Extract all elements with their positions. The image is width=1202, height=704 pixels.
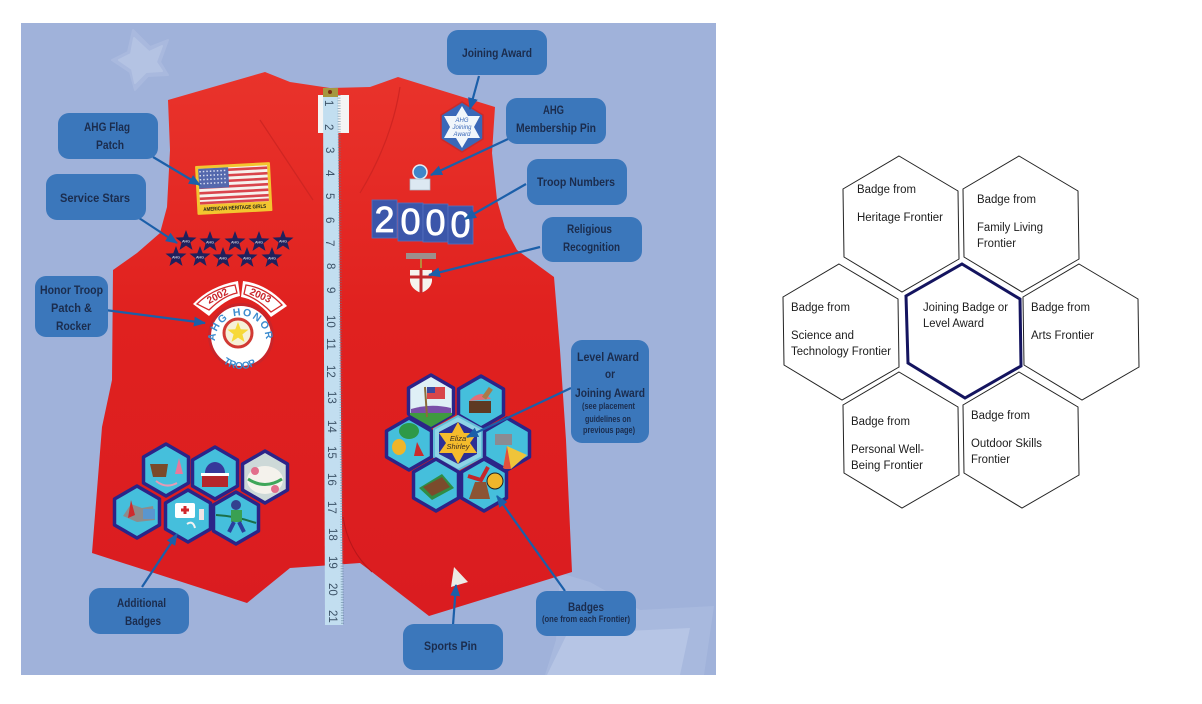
callout: sports pin (403, 624, 503, 670)
background star top left (112, 30, 168, 90)
honor patch: TROOP (224, 357, 254, 369)
measuring tape: 8 (324, 263, 336, 269)
callout: AHG flag patch: AHG Flag (84, 120, 130, 134)
measuring tape: 2 (322, 124, 334, 130)
hexagon: personal well-being frontier: Being Frontier (851, 460, 923, 472)
callout: AHG membership pin (506, 98, 606, 144)
hexagon: family living frontier: Frontier (977, 238, 1016, 250)
hexagon: arts frontier: Badge from (1031, 302, 1090, 314)
badge: bible (414, 459, 458, 511)
joining award patch: Award (453, 132, 471, 138)
measuring tape: 17 (325, 501, 337, 514)
hexagon: outdoor skills frontier: Badge from (971, 410, 1030, 422)
callout: level award (571, 340, 649, 443)
service stars: AHG (231, 240, 239, 244)
badge: level award star (434, 416, 482, 470)
callout: troop numbers: Troop Numbers (537, 175, 615, 189)
callout: level award: Joining Award (575, 386, 645, 400)
hexagon: science and technology frontier: Technology Frontier (791, 346, 891, 358)
hexagon: family living frontier: Family Living (977, 222, 1043, 234)
badge: first aid (166, 490, 210, 542)
hexagon: personal well-being frontier (843, 372, 959, 508)
hexagon: arts frontier (1023, 264, 1139, 400)
callout: badges: (one from each Frontier) (542, 614, 630, 624)
callout: level award: or (605, 367, 615, 381)
religious recognition medal (406, 253, 436, 293)
arrow: additional badges (142, 534, 177, 587)
callout: sports pin: Sports Pin (424, 639, 477, 653)
service stars: AHG (206, 240, 214, 244)
measuring tape: 6 (323, 217, 335, 223)
service stars: AHG (279, 240, 287, 244)
troop number patches: 2 (374, 199, 395, 240)
frontier badges group (386, 375, 530, 511)
callout: level award: previous page) (583, 425, 635, 435)
callout: religious recognition (542, 217, 642, 262)
honor troop patch and rocker (193, 281, 287, 369)
honor patch: AHG HONOR (208, 308, 273, 341)
badge: arts prism (484, 418, 530, 470)
troop number patches: 0 (425, 202, 446, 243)
rocker 2002: 2002 (205, 287, 231, 307)
badge: level award star: Shirley (447, 442, 471, 451)
hexagon: heritage frontier: Heritage Frontier (857, 212, 943, 224)
joining award patch (441, 102, 483, 152)
troop number patches (372, 199, 473, 245)
callout: service stars: Service Stars (60, 191, 130, 205)
measuring tape: 21 (326, 610, 338, 623)
callout: badges (536, 591, 636, 636)
callout: honor troop: Honor Troop (40, 283, 103, 297)
background star bottom right (545, 573, 714, 675)
hexagon: heritage frontier (843, 156, 959, 292)
callout: troop numbers (527, 159, 627, 205)
badge: basket (144, 444, 188, 496)
sports pin (451, 567, 468, 587)
measuring tape: 3 (323, 147, 335, 153)
callout: religious recognition: Recognition (563, 240, 620, 254)
hexagon: joining badge or level award (906, 264, 1021, 398)
arrow: level award (467, 388, 571, 437)
badge: chest (458, 376, 504, 428)
callout: AHG flag patch: Patch (96, 138, 124, 152)
callout: additional badges: Badges (125, 614, 161, 628)
hexagon: arts frontier: Arts Frontier (1031, 330, 1094, 342)
flag patch (195, 162, 272, 215)
hexagon: outdoor skills frontier: Outdoor Skills (971, 438, 1042, 450)
badge: flag (408, 375, 454, 427)
measuring tape: 13 (325, 391, 337, 404)
hexagon: outdoor skills frontier (963, 372, 1079, 508)
callout: badges: Badges (568, 600, 604, 614)
measuring tape: 1 (322, 100, 334, 106)
flag patch: AMERICAN HERITAGE GIRLS (203, 204, 267, 213)
panel: vest photo (21, 23, 716, 675)
panel background (21, 23, 716, 675)
badge: outdoor (462, 459, 506, 511)
measuring tape: 11 (324, 338, 336, 350)
service stars: AHG (268, 256, 276, 260)
hexagon: outdoor skills frontier: Frontier (971, 454, 1010, 466)
arrow: membership pin (431, 139, 508, 175)
red vest (92, 72, 572, 616)
troop number patches: 0 (400, 201, 421, 242)
callout: additional badges (89, 588, 189, 634)
panel: badge placement hexagon diagram (783, 156, 1139, 508)
additional badges group (114, 444, 288, 544)
callout: level award: Level Award (577, 350, 639, 364)
arrows (105, 76, 571, 625)
callout: honor troop: Rocker (56, 319, 91, 333)
callout: religious recognition: Religious (567, 222, 612, 236)
service stars: AHG (219, 256, 227, 260)
measuring tape: 15 (325, 446, 337, 459)
service stars: AHG (255, 240, 263, 244)
arrow: troop numbers (465, 184, 526, 219)
measuring tape: 18 (326, 528, 338, 541)
measuring tape: 7 (323, 240, 335, 246)
callout: service stars (46, 174, 146, 220)
hexagon: joining badge or level award: Level Award (923, 318, 984, 330)
hexagon: family living frontier: Badge from (977, 194, 1036, 206)
badge: map (114, 486, 160, 538)
joining award patch: AHG (454, 118, 469, 124)
badge: level award star: Eliza (450, 434, 466, 443)
callout: honor troop: Patch & (51, 301, 92, 315)
badge: nature (386, 418, 432, 470)
measuring tape: 10 (324, 315, 336, 328)
arrow: honor troop (105, 310, 205, 323)
service stars: AHG (243, 256, 251, 260)
measuring tape: 19 (326, 556, 338, 569)
callout: AHG flag patch (58, 113, 158, 159)
callout: AHG membership pin: Membership Pin (516, 121, 596, 135)
arrow: service stars (139, 218, 177, 243)
arrow: badges (497, 496, 565, 591)
measuring tape: 16 (325, 473, 337, 486)
callouts (35, 30, 649, 670)
callout: level award: (see placement (582, 401, 635, 411)
callout: joining award (447, 30, 547, 75)
service stars: AHG (182, 240, 190, 244)
badge: capitol (192, 447, 238, 499)
hexagon: personal well-being frontier: Personal Well- (851, 444, 924, 456)
hexagon: personal well-being frontier: Badge from (851, 416, 910, 428)
measuring tape: 9 (324, 287, 336, 293)
measuring tape: 4 (323, 170, 335, 177)
callout: joining award: Joining Award (462, 46, 532, 60)
arrow: joining award (470, 76, 479, 109)
honor patch (208, 303, 274, 369)
service stars: AHG (172, 256, 180, 260)
callout: level award: guidelines on (585, 414, 631, 424)
measuring tape: 5 (323, 193, 335, 199)
hexagon: family living frontier (963, 156, 1079, 292)
hexagon: joining badge or level award: Joining Badge or (923, 302, 1008, 314)
arrow: religious recognition (429, 247, 540, 275)
measuring tape: 12 (324, 365, 336, 378)
hexagon: science and technology frontier: Science and (791, 330, 854, 342)
hexagon: heritage frontier: Badge from (857, 184, 916, 196)
measuring tape (318, 88, 349, 625)
callout: AHG membership pin: AHG (543, 103, 564, 117)
badge: hiker (214, 492, 258, 544)
troop number patches: 0 (450, 204, 471, 245)
rocker 2003: 2003 (248, 287, 273, 306)
badge: cake (242, 451, 288, 503)
service stars: AHG (196, 256, 204, 260)
measuring tape: 20 (326, 583, 338, 596)
arrow: sports pin (453, 585, 456, 625)
callout: additional badges: Additional (117, 596, 166, 610)
service stars (166, 230, 294, 267)
callout: honor troop (35, 276, 108, 337)
membership pin (410, 165, 430, 190)
hexagon: science and technology frontier (783, 264, 899, 400)
arrow: flag patch (153, 157, 200, 185)
measuring tape: 14 (325, 420, 337, 433)
hexagon: science and technology frontier: Badge from (791, 302, 850, 314)
joining award patch: Joining (451, 125, 472, 131)
